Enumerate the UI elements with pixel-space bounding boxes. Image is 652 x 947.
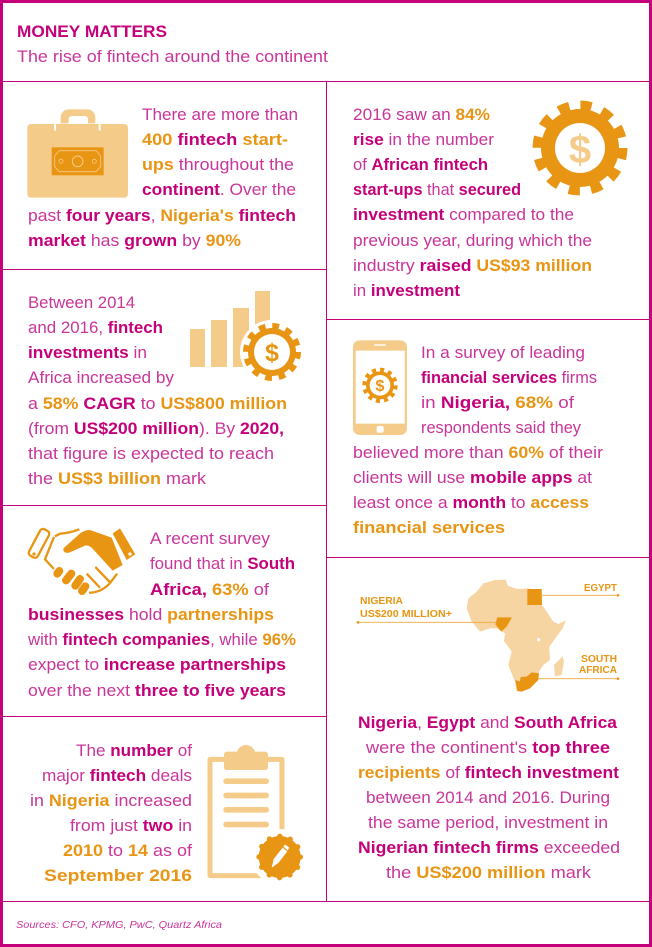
text block: over the next three to five years [28, 681, 286, 700]
text block: rise in the number [353, 130, 494, 149]
icon: phone with gear [353, 340, 407, 435]
text block: expect to increase partnerships [28, 655, 286, 674]
text block: financial services firms [421, 368, 597, 387]
sources: Sources: CFO, KPMG, PwC, Quartz Africa [16, 919, 222, 931]
map labels: NIGERIA [360, 596, 403, 607]
map labels: US$200 MILLION+ [360, 609, 452, 620]
text block: (from US$200 million). By 2020, [28, 419, 284, 438]
text block: the US$3 billion mark [28, 469, 207, 488]
panel: South Africa partnerships [27, 528, 296, 700]
text block: between 2014 and 2016. During [366, 788, 610, 807]
text block: believed more than 60% of their [353, 443, 603, 462]
text block: found that in South [150, 554, 295, 573]
text block: a 58% CAGR to US$800 million [28, 394, 287, 413]
text block [28, 105, 298, 250]
icon: briefcase with banknote [27, 109, 128, 198]
text block: The number of [76, 741, 192, 760]
text block: previous year, during which the [353, 231, 592, 250]
text block: least once a month to access [353, 493, 589, 512]
text block: the US$200 million mark [386, 863, 592, 882]
text block: in investment [353, 281, 460, 300]
text block: Nigerian fintech firms exceeded [358, 838, 620, 857]
icon: bar chart with gear [190, 291, 304, 384]
text block: respondents said they [421, 418, 581, 437]
map: Africa with highlighted countries [357, 580, 619, 692]
title: The rise of fintech around the continent [17, 47, 328, 66]
text block: of African fintech [353, 155, 488, 174]
text block [30, 741, 192, 885]
panel: investments growth [28, 291, 304, 488]
map labels [360, 583, 617, 676]
text block: investment compared to the [353, 205, 574, 224]
title [17, 22, 328, 66]
text block: Between 2014 [28, 293, 135, 312]
panel: top three recipients [357, 580, 620, 882]
text block: were the continent's top three [365, 738, 610, 757]
text block: Africa, 63% of [150, 580, 269, 599]
text block: businesses hold partnerships [28, 605, 274, 624]
panel: Nigeria deals [30, 741, 308, 885]
icon: handshake [28, 528, 135, 593]
text block: market has grown by 90% [28, 231, 241, 250]
text block: September 2016 [44, 866, 192, 885]
text block: There are more than [142, 105, 298, 124]
text block: A recent survey [150, 529, 271, 548]
text block: that figure is expected to reach [28, 444, 274, 463]
text block [358, 713, 620, 882]
text block: industry raised US$93 million [353, 256, 592, 275]
text block: 2016 saw an 84% [353, 105, 490, 124]
text block: in Nigeria increased [30, 791, 192, 810]
text block: major fintech deals [42, 766, 192, 785]
text block: investments in [28, 343, 147, 362]
text block [353, 343, 603, 537]
text block: 400 fintech start- [142, 130, 288, 149]
icon: dollar gear [538, 106, 622, 190]
text block: Africa increased by [28, 368, 174, 387]
panel: mobile apps survey [353, 340, 603, 537]
icon: bar chart with gear: $ [265, 339, 279, 367]
text block: In a survey of leading [421, 343, 585, 362]
text block: past four years, Nigeria's fintech [28, 206, 296, 225]
title: MONEY MATTERS [17, 22, 167, 41]
text block: financial services [353, 518, 505, 537]
map labels: EGYPT [584, 583, 617, 594]
panel: secured investment [353, 105, 622, 300]
text block: the same period, investment in [368, 813, 608, 832]
text block: from just two in [70, 816, 192, 835]
text block [27, 529, 296, 700]
text block: and 2016, fintech [28, 318, 163, 337]
text block: Nigeria, Egypt and South Africa [358, 713, 618, 732]
text block: with fintech companies, while 96% [27, 630, 296, 649]
text block: ups throughout the [142, 155, 294, 174]
icon: phone with gear: $ [376, 378, 385, 395]
icon: dollar gear: $ [569, 128, 591, 172]
text block: clients will use mobile apps at [353, 468, 592, 487]
text block: continent. Over the [142, 180, 296, 199]
text block [353, 105, 592, 300]
icon: clipboard with pencil badge [210, 745, 308, 885]
panel: fintech start-ups [27, 105, 298, 250]
text block: recipients of fintech investment [358, 763, 619, 782]
map labels: AFRICA [579, 665, 617, 676]
text block: start-ups that secured [353, 180, 521, 199]
text block: in Nigeria, 68% of [421, 393, 574, 412]
map labels: SOUTH [581, 654, 617, 665]
text block [28, 293, 287, 488]
text block: 2010 to 14 as of [63, 841, 192, 860]
